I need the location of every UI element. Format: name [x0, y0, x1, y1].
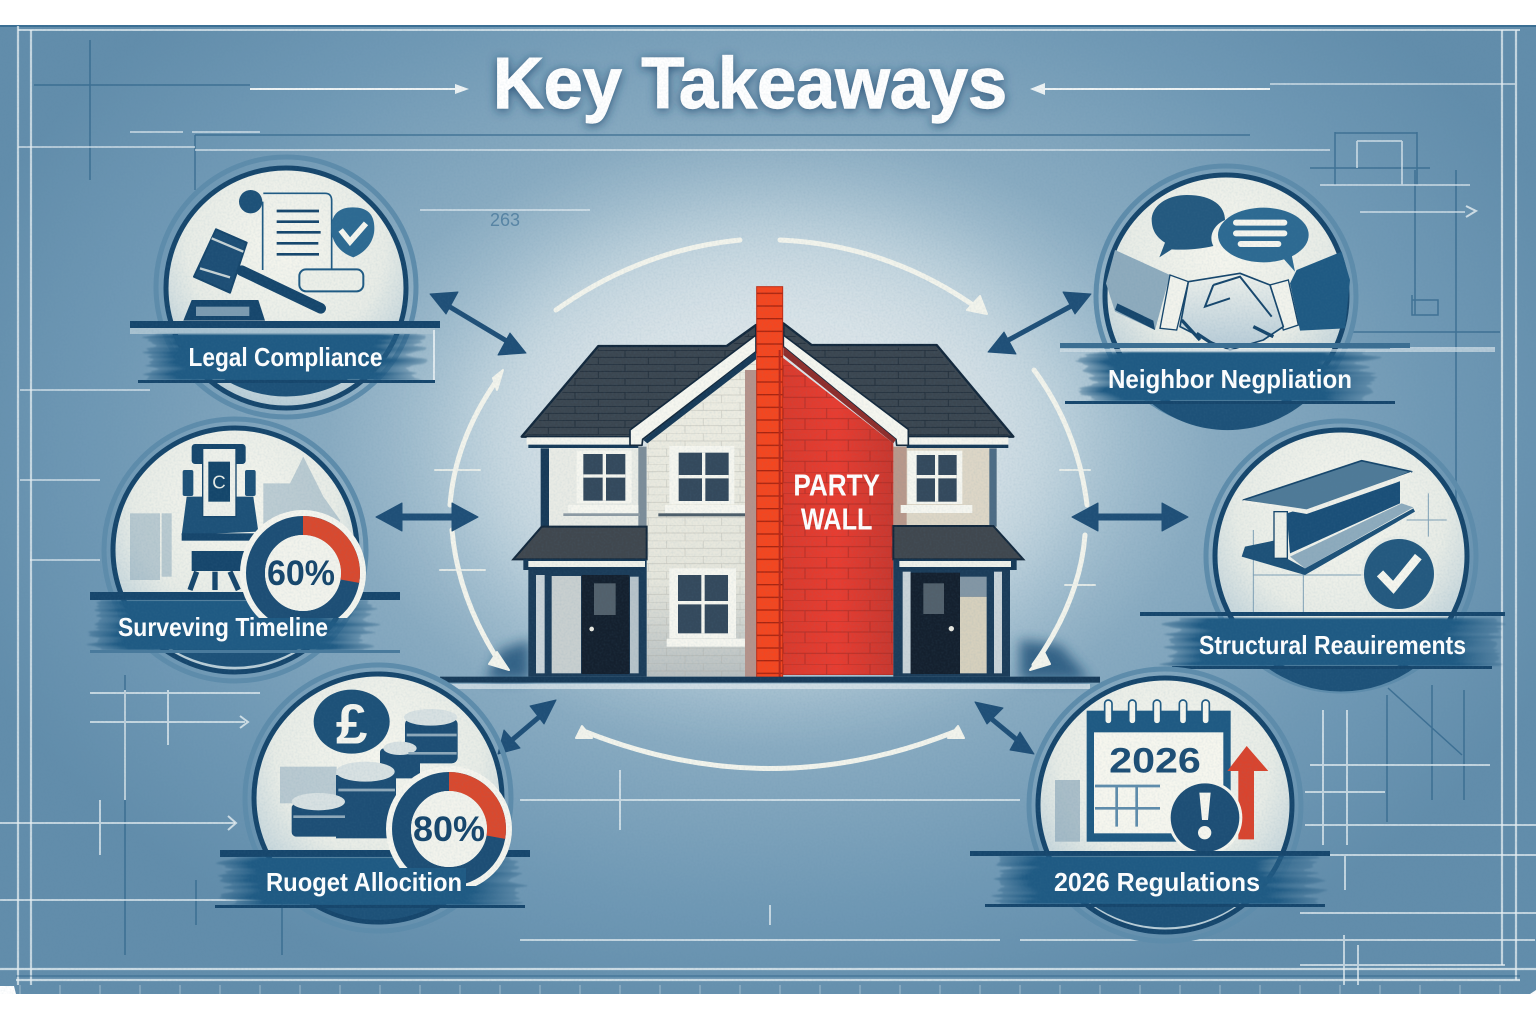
gable trim: left [630, 335, 756, 445]
cycle arrows around the house [435, 240, 1095, 768]
panel: neighbor negotiation [1060, 166, 1495, 430]
wall: cream centre [647, 358, 757, 677]
banner: surveying timeline [90, 592, 400, 667]
smudges at house base [486, 640, 1090, 680]
banner: legal compliance [130, 321, 440, 396]
arrow: title right [1030, 83, 1270, 95]
chimney [757, 287, 783, 681]
eaves [527, 437, 630, 445]
window: centre upper [658, 446, 745, 516]
roof: right [783, 323, 1013, 437]
icon: gavel and document [183, 190, 374, 321]
icon: 2026 calendar with alert [1055, 700, 1268, 855]
label: budget allocation: Ruoget Allocition [266, 867, 462, 897]
blueprint grid lines: 263 [490, 210, 520, 230]
party wall label: PARTY [793, 468, 880, 502]
ground highlight [450, 684, 1090, 689]
icon: total station surveying instrument [130, 444, 340, 590]
arrow: title left [250, 84, 469, 94]
icon: total station surveying instrument: C [212, 471, 226, 492]
banner: budget allocation [215, 850, 530, 920]
icon: 2026 calendar with alert: 2026 [1109, 742, 1201, 781]
banner: structural requirements: Structural Reauirements [1199, 630, 1466, 660]
icon: pound symbol and coin stacks: £ [336, 693, 367, 756]
banner: 2026 regulations: 2026 Regulations [1054, 867, 1260, 897]
banner: 2026 regulations [970, 851, 1330, 928]
banner: legal compliance: Legal Compliance [188, 342, 382, 372]
gauge: 60 percent [240, 510, 366, 618]
window: centre lower [667, 568, 745, 647]
halo glow around house [470, 220, 1070, 660]
ground line [440, 677, 1100, 683]
icon: steel I-beam and check [1242, 461, 1447, 613]
double arrows linking takeaways to house [376, 292, 1188, 754]
banner: neighbor negotiation [1060, 343, 1495, 430]
panel: 2026 regulations [970, 669, 1330, 941]
gauge: 60 percent: 60% [267, 554, 335, 593]
house illustration with party wall [440, 287, 1100, 683]
porch: right [893, 526, 1023, 677]
icon: handshake and speech bubbles [1106, 195, 1350, 350]
window: right wing [901, 451, 972, 513]
label: surveying timeline: Surveving Timeline [118, 612, 328, 642]
porch: left [513, 527, 647, 677]
gable trim: right [783, 335, 908, 445]
panel: structural requirements [1140, 421, 1505, 692]
icon: pound symbol and coin stacks [280, 690, 458, 838]
roof: left [522, 325, 757, 438]
banner: neighbor negotiation: Neighbor Negpliation [1108, 364, 1352, 394]
house: left wing wall [542, 447, 647, 528]
window: left wing [563, 451, 640, 516]
gauge: 80 percent [386, 766, 512, 892]
banner: structural requirements [1140, 612, 1505, 692]
party wall label [793, 468, 880, 536]
panel: surveying timeline [90, 419, 400, 681]
party wall label: WALL [801, 502, 872, 536]
panel: budget allocation [215, 665, 530, 931]
gauge: 80 percent: 80% [413, 810, 485, 849]
wall: red party wall [779, 355, 893, 675]
title: Key Takeaways [493, 44, 1007, 124]
panel: legal compliance [130, 157, 440, 417]
house: right wing wall [893, 447, 997, 528]
